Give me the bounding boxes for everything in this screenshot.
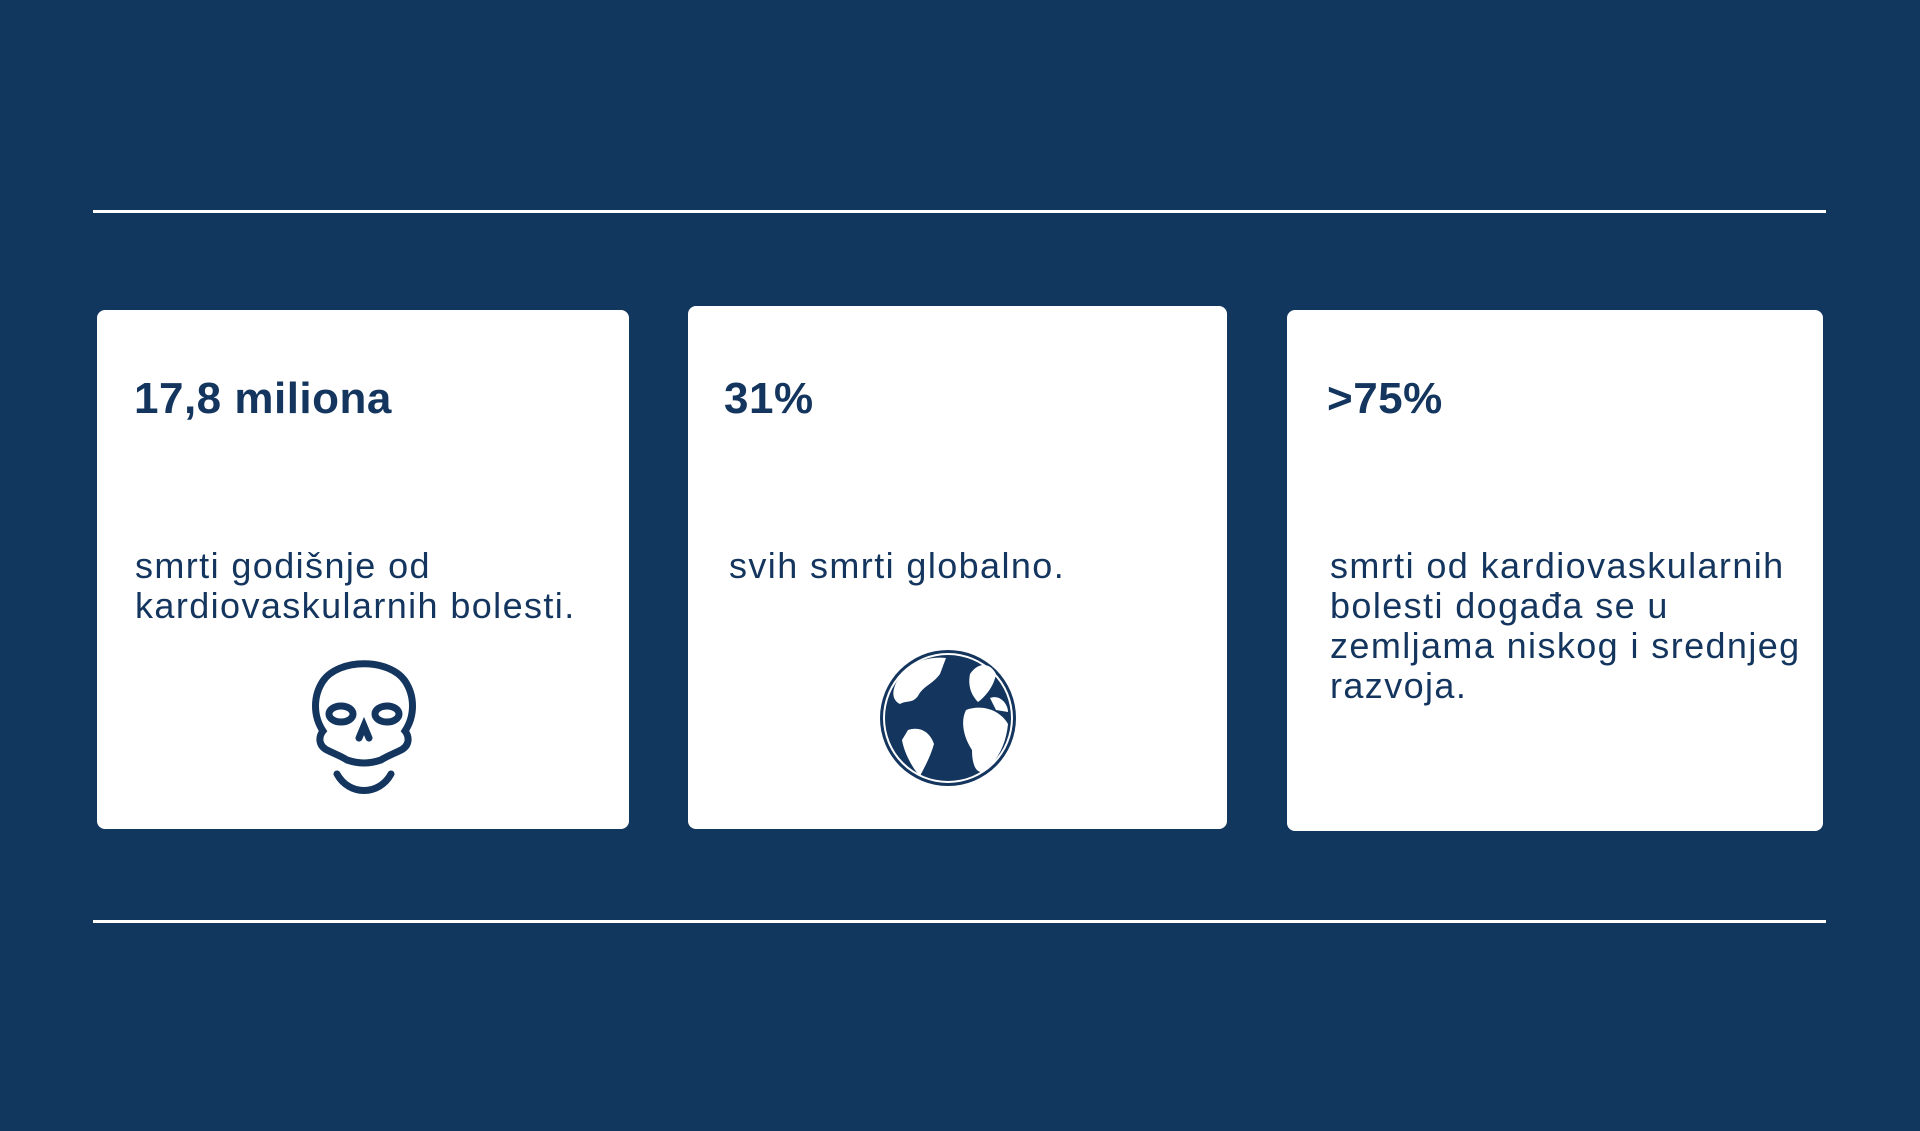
text: all deaths globally: svih smrti globalno. xyxy=(729,545,1065,586)
text: low/middle income countries: smrti od kardiovaskularnih xyxy=(1330,545,1785,586)
icon: skull xyxy=(312,660,416,794)
heading: 31%: 31% xyxy=(724,374,814,423)
text: deaths description: kardiovaskularnih bolesti. xyxy=(135,585,576,626)
text: deaths description: smrti godišnje od xyxy=(135,545,431,586)
text: deaths description xyxy=(135,545,576,626)
panel: deaths per year xyxy=(97,310,629,829)
text: low/middle income countries: zemljama niskog i srednjeg xyxy=(1330,625,1801,666)
text: low/middle income countries: bolesti događa se u xyxy=(1330,585,1669,626)
text: low/middle income countries: razvoja. xyxy=(1330,665,1467,706)
heading: >75%: >75% xyxy=(1327,374,1443,423)
text: low/middle income countries xyxy=(1330,545,1801,706)
icon: globe xyxy=(880,650,1016,786)
panel: global share xyxy=(688,306,1227,829)
panel: low and middle income xyxy=(1287,310,1823,831)
heading: 17,8 miliona: 17,8 miliona xyxy=(134,374,392,423)
